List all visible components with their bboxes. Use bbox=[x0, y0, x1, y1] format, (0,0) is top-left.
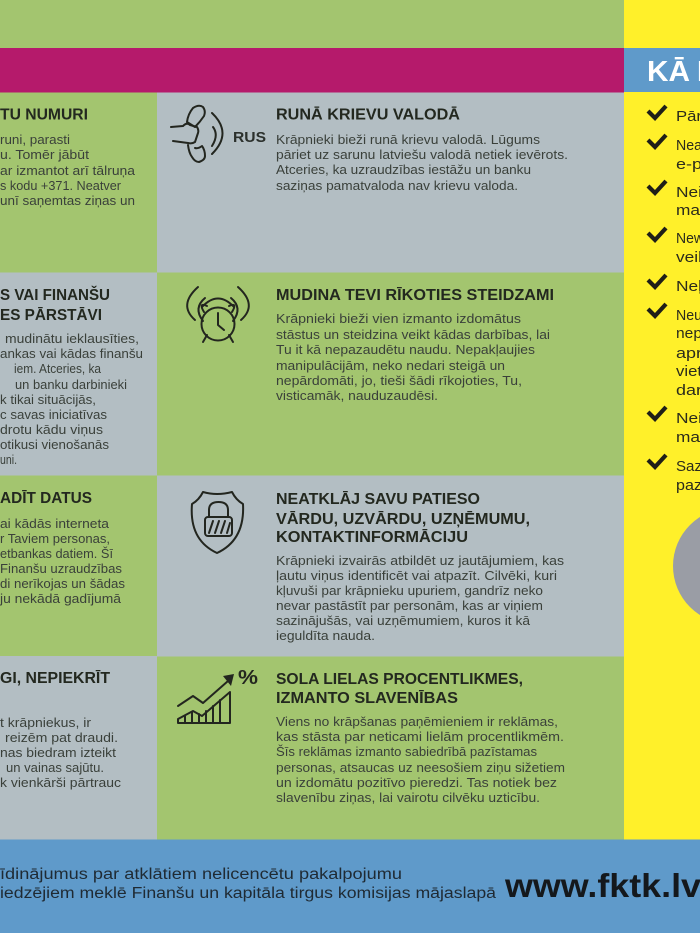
text: urges to act quickly: Krāpnieki bieži vien izmanto izdomātus bbox=[276, 312, 521, 326]
panel: high interest rates bbox=[157, 656, 624, 840]
text: numbers: unī saņemtas ziņas un bbox=[0, 194, 135, 208]
heading: high interest rates: SOLA LIELAS PROCENTLIKMES, bbox=[276, 671, 523, 688]
text: stay calm: reizēm pat draudi. bbox=[5, 731, 118, 745]
advice list bbox=[676, 108, 700, 494]
text: urges to act quickly: Tu it kā nepazaudētu naudu. Nepakļaujies bbox=[276, 343, 535, 357]
text: numbers: ar izmantot arī tālruņa bbox=[0, 164, 135, 178]
panel: how to protect yourself bbox=[624, 0, 700, 840]
heading: asks for data: ADĪT DATUS bbox=[0, 490, 92, 507]
advice list: Nei bbox=[676, 184, 700, 201]
text: stay calm: k vienkārši pārtrauc bbox=[0, 776, 121, 790]
heading: bank representatives: ES PĀRSTĀVI bbox=[0, 307, 102, 324]
text: hides identity: sazinājušās, vai uzņēmumiem, kuros it kā bbox=[276, 614, 530, 628]
check marks bbox=[648, 106, 666, 467]
heading: speaks Russian: RUNĀ KRIEVU VALODĀ bbox=[276, 106, 460, 124]
icon: shield with padlock bbox=[192, 492, 243, 553]
heading bar: KĀ bbox=[647, 56, 690, 88]
text: urges to act quickly: manipulācijām, neko nedari steigā un bbox=[276, 359, 505, 373]
text: high interest rates: slavenību ziņas, lai vairotu cilvēku uzticību. bbox=[276, 791, 540, 805]
heading: high interest rates bbox=[276, 671, 523, 707]
text: bank representatives: uni. bbox=[0, 453, 17, 467]
text: asks for data: ai kādās interneta bbox=[0, 517, 109, 531]
heading: hides identity: NEATKLĀJ SAVU PATIESO bbox=[276, 491, 480, 508]
heading: stay calm: GI, NEPIEKRĪT bbox=[0, 670, 111, 687]
text: hides identity: ļautu viņus identificēt vai atpazīt. Cilvēki, kuri bbox=[276, 569, 557, 583]
text: stay calm bbox=[0, 716, 121, 790]
icon: alarm clock bbox=[187, 287, 249, 342]
advice list: ma bbox=[676, 429, 700, 446]
text: speaks Russian: Krāpnieki bieži runā krievu valodā. Lūgums bbox=[276, 133, 540, 147]
text: speaks Russian bbox=[276, 133, 568, 193]
text: urges to act quickly: stāstus un steidzina veikt kādas darbības, lai bbox=[276, 328, 550, 342]
advice list: dar bbox=[676, 382, 700, 399]
magenta header band bbox=[0, 48, 624, 92]
heading: bank representatives: S VAI FINANŠU bbox=[0, 286, 110, 304]
advice list: Pār bbox=[676, 108, 700, 125]
advice list: veil bbox=[676, 249, 700, 266]
label: RUS: RUS bbox=[233, 130, 266, 146]
text: speaks Russian: saziņas pamatvaloda nav krievu valoda. bbox=[276, 179, 518, 193]
panel: speaks Russian bbox=[157, 92, 624, 272]
text: hides identity bbox=[276, 554, 564, 643]
website address: www.fktk.lv bbox=[504, 867, 700, 904]
text: hides identity: Krāpnieki izvairās atbildēt uz jautājumiem, kas bbox=[276, 554, 564, 568]
text: asks for data bbox=[0, 517, 125, 606]
text: hides identity: ieguldīta nauda. bbox=[276, 629, 375, 643]
text: bank representatives bbox=[0, 332, 143, 467]
heading: bank representatives bbox=[0, 286, 110, 324]
text: speaks Russian: pāriet uz sarunu latviešu valodā netiek ievērots. bbox=[276, 148, 568, 162]
heading bar bbox=[624, 48, 700, 92]
text: urges to act quickly bbox=[276, 312, 550, 403]
heading: hides identity: VĀRDU, UZVĀRDU, UZŅĒMUMU, bbox=[276, 511, 530, 528]
advice list: ma bbox=[676, 202, 700, 219]
text: numbers: s kodu +371. Neatver bbox=[0, 179, 121, 193]
footer text: iedzējiem meklē Finanšu un kapitāla tirgus komisijas mājaslapā bbox=[0, 885, 496, 902]
text: high interest rates bbox=[276, 715, 565, 805]
text: bank representatives: drotu kādu viņus bbox=[0, 423, 103, 437]
text: high interest rates: personas, atsaucas uz neesošiem ziņu sižetiem bbox=[276, 761, 565, 775]
heading: hides identity bbox=[276, 491, 530, 546]
text: bank representatives: mudinātu ieklausīties, bbox=[5, 332, 139, 346]
text: high interest rates: kas stāsta par neticami lielām procentlikmēm. bbox=[276, 730, 564, 744]
heading: urges to act quickly: MUDINA TEVI RĪKOTIES STEIDZAMI bbox=[276, 287, 554, 304]
text: speaks Russian: Atceries, ka uzraudzības iestāžu un banku bbox=[276, 163, 531, 177]
text: numbers bbox=[0, 133, 135, 208]
advice list: Neļ bbox=[676, 278, 700, 295]
text: stay calm: un vainas sajūtu. bbox=[6, 761, 104, 775]
panel: hides identity bbox=[157, 476, 624, 656]
icon: rising chart with percent bbox=[178, 667, 258, 723]
advice list: apr bbox=[676, 345, 700, 362]
text: hides identity: nevar pastāstīt par personām, kas ar viņiem bbox=[276, 599, 543, 613]
footer bbox=[0, 840, 700, 933]
text: high interest rates: un izdomātu pozitīvo pieredzi. Tas notiek bez bbox=[276, 776, 557, 790]
heading: high interest rates: IZMANTO SLAVENĪBAS bbox=[276, 690, 458, 707]
text: bank representatives: k tikai situācijās, bbox=[0, 393, 96, 407]
text: asks for data: di nerīkojas un šādas bbox=[0, 577, 125, 591]
panel: stay calm bbox=[0, 656, 157, 840]
footer text bbox=[0, 866, 496, 902]
text: urges to act quickly: visticamāk, nauduzaudēsi. bbox=[276, 389, 438, 403]
icon: hand holding phone bbox=[171, 106, 222, 162]
text: bank representatives: ankas vai kādas finanšu bbox=[0, 347, 143, 361]
text: urges to act quickly: nepārdomāti, jo, tieši šādi rīkojoties, Tu, bbox=[276, 374, 522, 388]
text: hides identity: kļuvuši par krāpnieku upuriem, gandrīz neko bbox=[276, 584, 543, 598]
advice list: Nei bbox=[676, 410, 700, 427]
text: high interest rates: Viens no krāpšanas paņēmieniem ir reklāmas, bbox=[276, 715, 558, 729]
advice list: e-p bbox=[676, 156, 700, 173]
text: asks for data: ju nekādā gadījumā bbox=[0, 592, 121, 606]
text: high interest rates: Šīs reklāmas izmanto sabiedrībā pazīstamas bbox=[276, 744, 537, 759]
advice list: viet bbox=[676, 363, 700, 380]
text: asks for data: r Taviem personas, bbox=[0, 532, 110, 546]
grey circle bbox=[673, 508, 700, 624]
footer text: īdinājumus par atklātiem nelicencētu pakalpojumu bbox=[0, 866, 402, 883]
text: bank representatives: c savas iniciatīvas bbox=[0, 408, 107, 422]
text: numbers: u. Tomēr jābūt bbox=[0, 148, 90, 162]
heading: numbers: TU NUMURI bbox=[0, 106, 88, 124]
text: bank representatives: otikusi vienošanās bbox=[0, 438, 109, 452]
text: asks for data: Finanšu uzraudzības bbox=[0, 562, 122, 576]
text: stay calm: nas biedram izteikt bbox=[0, 746, 117, 760]
text: numbers: runi, parasti bbox=[0, 133, 70, 147]
text: bank representatives: un banku darbinieki bbox=[15, 378, 127, 392]
text: stay calm: t krāpniekus, ir bbox=[0, 716, 91, 730]
percent sign: % bbox=[238, 667, 258, 689]
text: bank representatives: iem. Atceries, ka bbox=[14, 362, 101, 376]
heading: hides identity: KONTAKTINFORMĀCIJU bbox=[276, 529, 468, 546]
panel: urges to act quickly bbox=[157, 272, 624, 476]
panel: bank representatives bbox=[0, 272, 157, 476]
text: asks for data: etbankas datiem. Šī bbox=[0, 546, 114, 561]
panel: asks for data bbox=[0, 476, 157, 656]
advice list: paz bbox=[676, 477, 700, 494]
top green strip bbox=[0, 0, 624, 48]
panel: numbers bbox=[0, 92, 157, 272]
